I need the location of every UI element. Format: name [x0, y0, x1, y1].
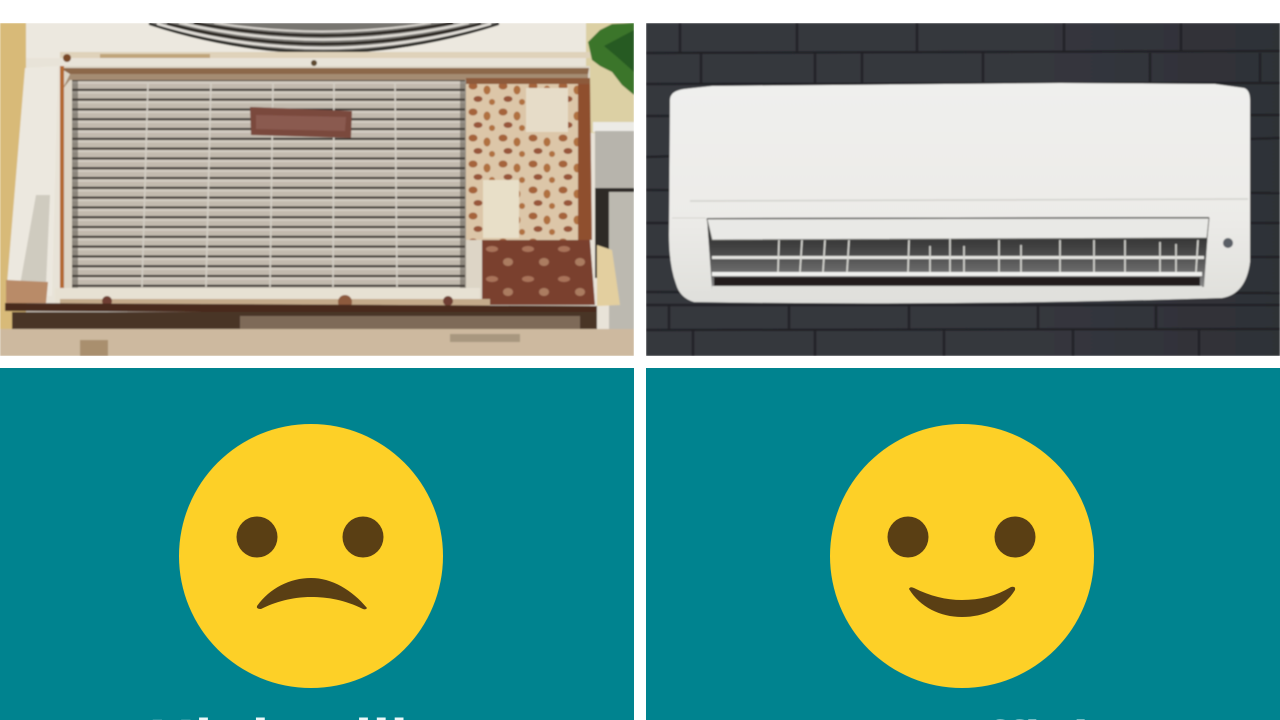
surroundings at right [586, 23, 634, 133]
AC vent opening [707, 217, 1209, 290]
icon: happy face [830, 424, 1094, 688]
ledge [0, 329, 634, 356]
AC sensor dot [1223, 238, 1233, 248]
top rusty strip [60, 52, 590, 58]
rusted side panel [466, 78, 595, 305]
coil at top of unit [148, 23, 498, 54]
photo: new white wall-mounted air conditioner [646, 23, 1280, 356]
brick wall [646, 23, 1280, 356]
photo: old rusty air conditioner [0, 23, 634, 356]
grille [72, 80, 466, 288]
plant [588, 23, 634, 95]
left white strip [6, 67, 28, 282]
rusted name plate [250, 107, 352, 138]
AC body [669, 83, 1250, 303]
unit frame [60, 66, 590, 306]
icon: sad face [179, 424, 443, 688]
panel: new unit, teal [646, 368, 1280, 720]
lower rim [59, 286, 480, 299]
dark gap under unit [12, 312, 597, 329]
panel: old unit, teal [0, 368, 634, 720]
